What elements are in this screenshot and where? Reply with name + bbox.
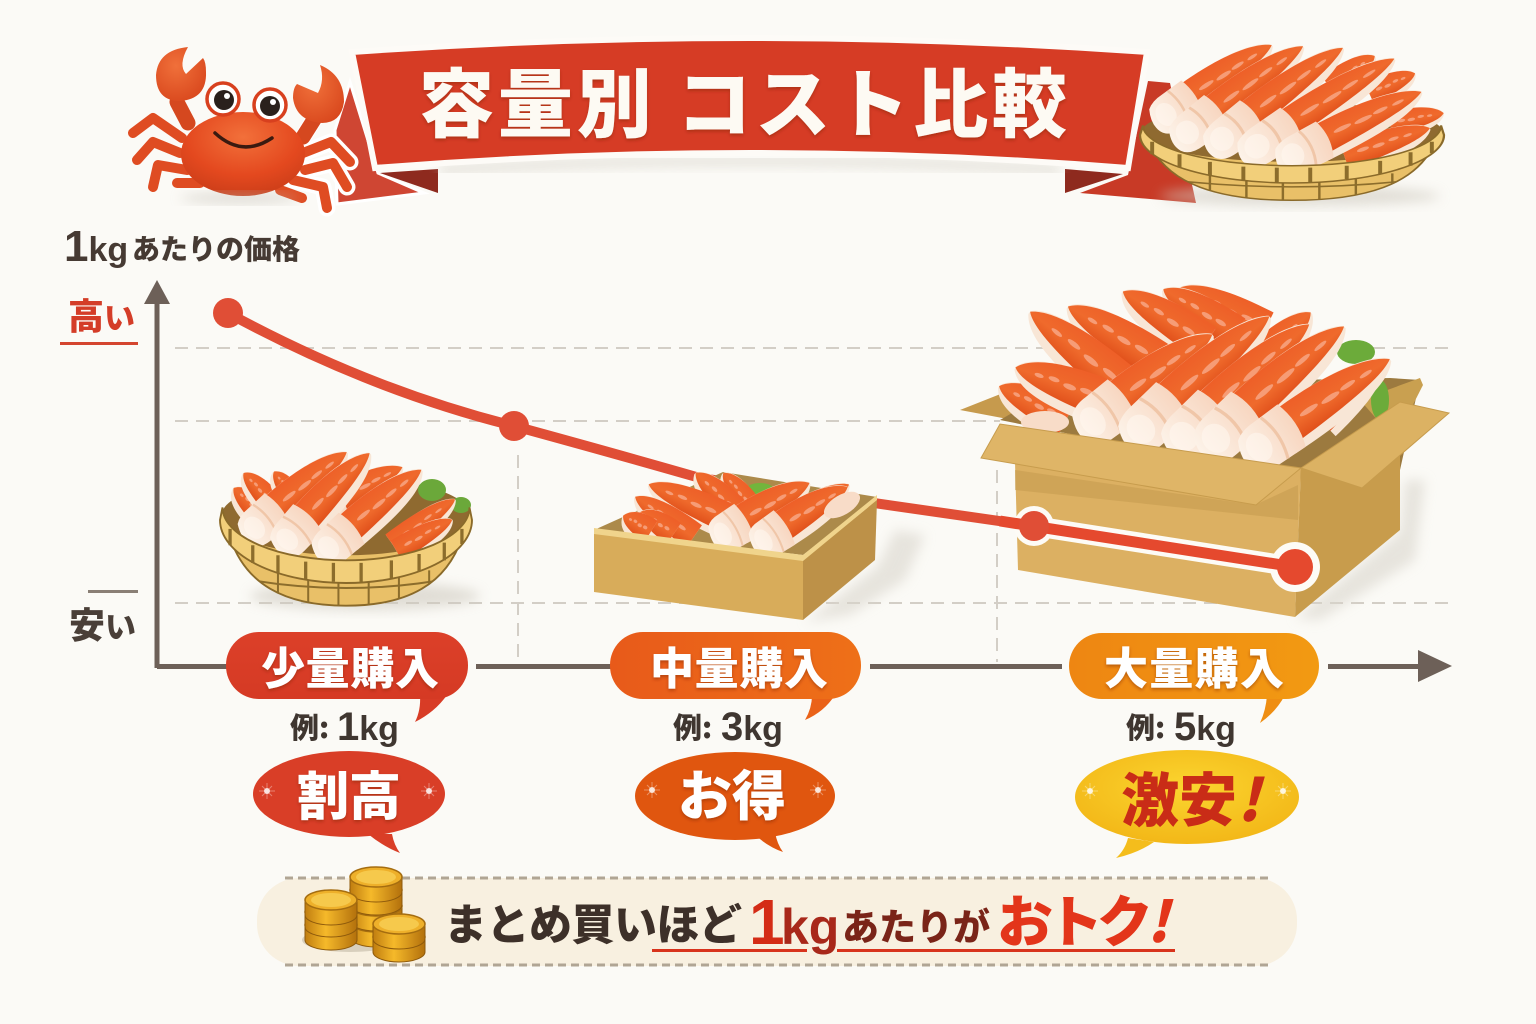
summary text: kg <box>781 899 839 955</box>
grid lines <box>175 348 1450 662</box>
price bubble <box>635 752 835 852</box>
small basket <box>220 437 480 610</box>
front crab legs <box>1063 298 1404 479</box>
price bubble: 激安! <box>1121 754 1265 838</box>
price line over box <box>1000 506 1320 592</box>
ribbon tail right <box>1065 81 1196 203</box>
underlines <box>652 949 1175 952</box>
summary text: まとめ買いほど <box>444 891 742 953</box>
example weight: 5kg <box>1174 705 1236 749</box>
example weight: 3kg <box>721 705 783 749</box>
y axis title: 1kg <box>64 222 128 271</box>
y axis arrow <box>144 280 170 668</box>
label: low: 安い <box>69 597 136 649</box>
summary text: 1 <box>749 886 785 958</box>
box interior and back flaps <box>960 378 1423 480</box>
example weight <box>673 705 783 749</box>
y axis title <box>64 222 300 271</box>
crab legs <box>133 102 350 208</box>
crab mouth <box>215 133 272 147</box>
price bubble <box>253 751 445 853</box>
price bubble: 割高 <box>297 755 401 830</box>
crab legs <box>1142 29 1447 181</box>
summary banner <box>257 867 1297 966</box>
crab claws <box>156 47 344 123</box>
pill label <box>1069 633 1319 723</box>
title banner <box>335 38 1196 204</box>
crab mascot <box>133 47 350 208</box>
example weight: 例: <box>1126 705 1165 747</box>
banner body <box>352 38 1147 168</box>
crab body <box>181 112 305 196</box>
summary text <box>444 878 1174 959</box>
lettuce <box>1337 340 1389 420</box>
banner background <box>257 878 1297 966</box>
box faces <box>594 530 803 620</box>
medium box <box>594 462 925 622</box>
label: high: 高い <box>68 288 135 340</box>
pill label: 少量購入 <box>261 633 439 697</box>
example weight <box>290 705 399 749</box>
x axis arrow <box>157 650 1452 682</box>
lettuce <box>746 483 774 497</box>
ribbon tail left <box>335 82 438 204</box>
icon: gold coins <box>302 867 425 962</box>
pill label: 大量購入 <box>1104 633 1284 697</box>
crab eyes <box>207 83 286 121</box>
pill label: 中量購入 <box>650 633 828 697</box>
pill label <box>610 632 861 720</box>
crab legs <box>614 462 864 564</box>
price bubble: お得 <box>678 752 786 831</box>
basket of crab legs top right <box>1140 29 1447 206</box>
tier: small purchase <box>226 632 468 853</box>
summary text: あたりが <box>842 897 990 951</box>
price bubble <box>1075 750 1299 858</box>
rear crab legs <box>988 271 1397 442</box>
summary text: おトク! <box>997 878 1174 959</box>
y axis title: あたりの価格 <box>132 228 300 268</box>
box faces <box>981 402 1449 617</box>
example weight <box>1126 705 1236 749</box>
pill label <box>226 632 468 722</box>
tier: medium purchase <box>610 632 861 852</box>
example weight: 例: <box>673 705 712 747</box>
price line <box>213 298 1034 526</box>
tier: large purchase <box>1069 633 1319 858</box>
title text: 容量別 コスト比較 <box>419 44 1067 153</box>
example weight: 例: <box>290 705 329 747</box>
chart <box>60 222 1452 682</box>
crab legs <box>222 437 464 573</box>
large box <box>960 271 1449 620</box>
lettuce <box>418 479 471 513</box>
example weight: 1kg <box>337 705 399 749</box>
